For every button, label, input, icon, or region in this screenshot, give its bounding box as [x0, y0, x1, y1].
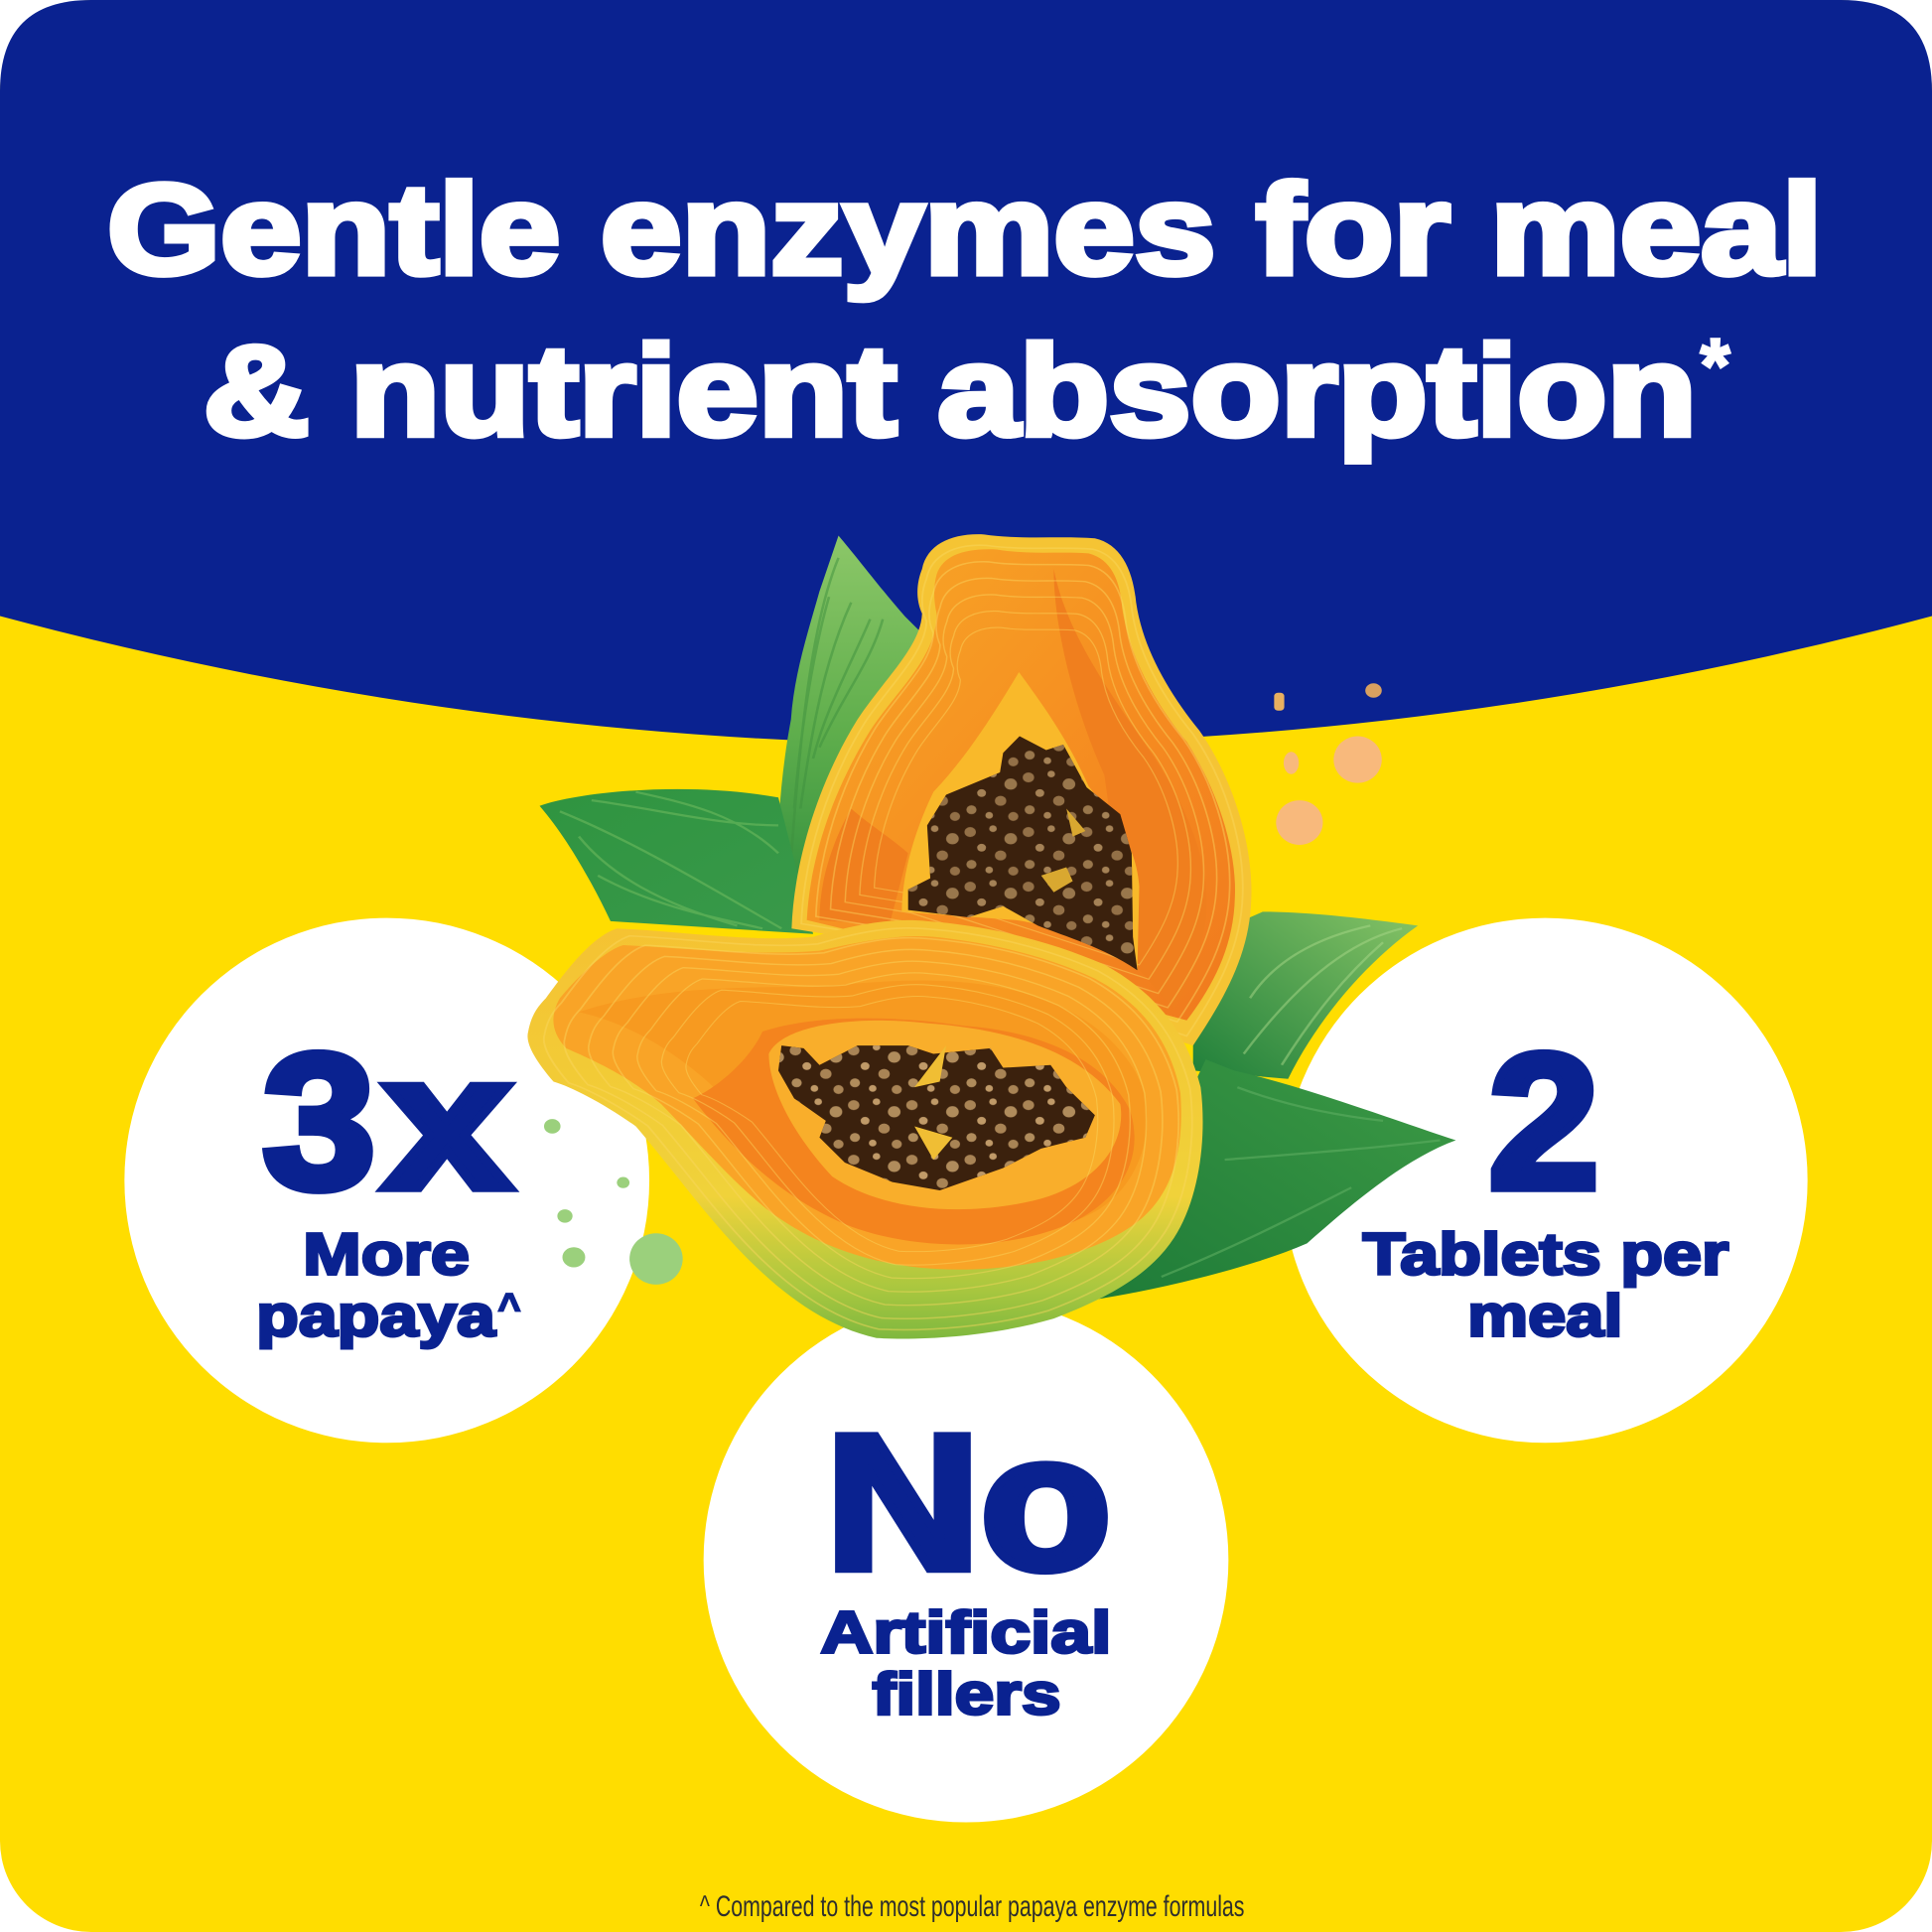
circle: 3x more papaya: More: [303, 1220, 470, 1287]
circle: no artificial fillers: Artificial: [821, 1598, 1111, 1665]
illustration: papaya halves and leaves: [527, 534, 1455, 1338]
leaf: upper right: [1193, 911, 1418, 1079]
circle: 3x more papaya: ^: [497, 1286, 521, 1329]
circle: 2 tablets per meal: [1283, 918, 1808, 1443]
circle: 2 tablets per meal: 2: [1488, 1015, 1599, 1229]
circle: no artificial fillers: [704, 1298, 1228, 1823]
circle: 3x more papaya: [124, 918, 649, 1443]
header: blue curved band: [0, 0, 1932, 745]
circle: 3x more papaya: 3: [262, 1015, 376, 1229]
circle: no artificial fillers: fillers: [873, 1660, 1061, 1726]
leaf: lower right: [1098, 1059, 1455, 1299]
title: Gentle enzymes for meal: [107, 159, 1823, 302]
papaya: upright half: [791, 534, 1252, 1045]
circle: 2 tablets per meal: meal: [1467, 1282, 1622, 1348]
circle: no artificial fillers: No: [826, 1396, 1111, 1610]
title: & nutrient absorption: [204, 320, 1697, 463]
footnote: ^ Compared to the most popular papaya enzyme formulas: [700, 1890, 1244, 1923]
splatter: green: [544, 1119, 683, 1285]
leaf: top: [777, 535, 952, 928]
circle: 3x more papaya: x: [383, 1015, 511, 1229]
papaya: lying half: [527, 920, 1203, 1338]
splatter: peach: [1274, 683, 1382, 845]
title: [107, 159, 1823, 463]
leaf: left: [540, 789, 813, 934]
circle: 3x more papaya: papaya: [256, 1282, 496, 1348]
circle: 2 tablets per meal: Tablets per: [1363, 1220, 1728, 1287]
title: *: [1701, 324, 1730, 409]
